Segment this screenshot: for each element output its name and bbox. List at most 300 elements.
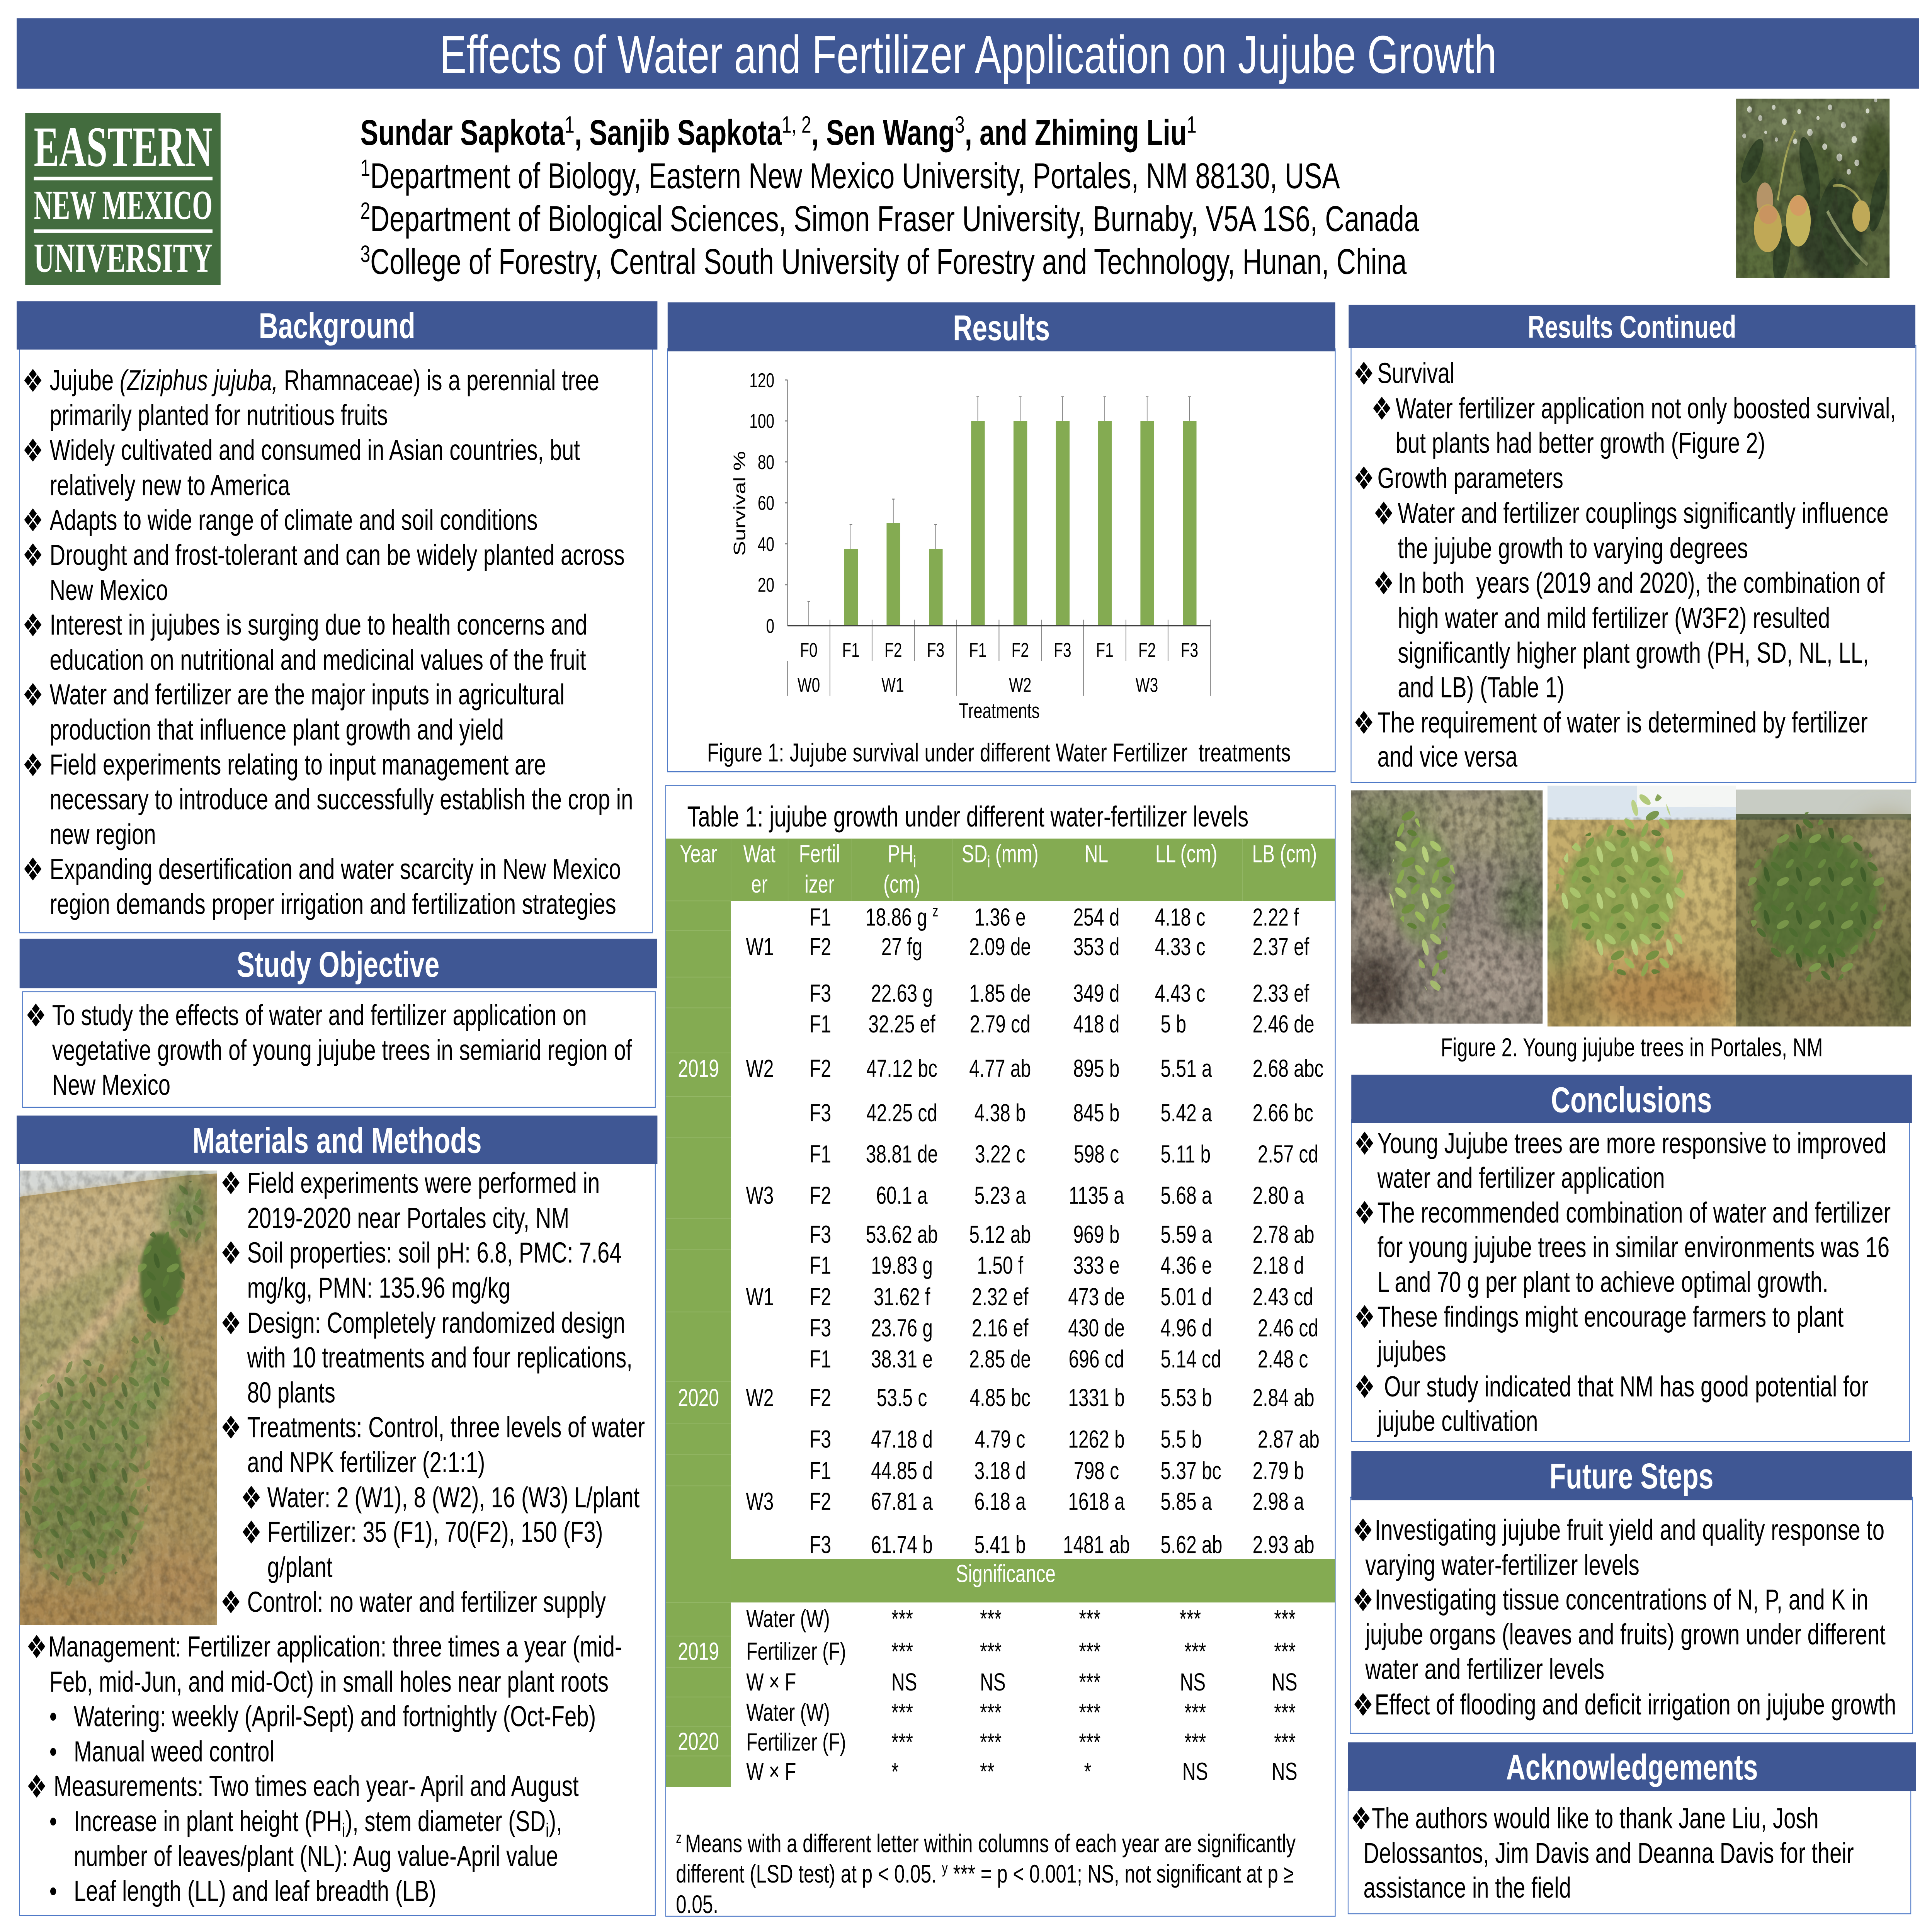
conclusions bullet list: ❖ [1354,1195,1375,1231]
acknowledgements text: Delossantos, Jim Davis and Deanna Davis for their [1363,1837,1854,1869]
future steps bullet list: ❖ [1352,1582,1374,1619]
methods list below photo: • [49,1701,57,1733]
methods list beside photo: ❖ [241,1514,262,1551]
panel: future steps [1350,1451,1913,1733]
bar chart: survival by treatment: F3 [1181,639,1198,661]
table footnote: different (LSD test) at p < 0.05. [676,1860,937,1888]
table body 2019: 4.38 b [975,1099,1026,1126]
bar chart: survival by treatment: 40 [758,533,774,555]
table body 2019: 18.86 g [866,903,927,931]
acknowledgements text [1350,1800,1854,1904]
figure 2 caption: Figure 2. Young jujube trees in Portales, NM [1440,1034,1823,1062]
significance rows: 2020 [678,1728,719,1755]
table body 2020: 5.85 a [1160,1488,1212,1515]
heading: materials and methods [17,1116,657,1164]
panel: table 1 growth data [666,785,1335,1919]
conclusions bullet list: Our study indicated that NM has good potential for [1384,1371,1869,1403]
methods list beside photo: ❖ [220,1584,242,1621]
table body 2019: 27 fg [881,933,922,961]
table body 2020: 1.50 f [977,1252,1023,1279]
table body 2020: 4.36 e [1160,1252,1212,1279]
study objective text: New Mexico [52,1069,170,1101]
table green bands [666,838,1335,1787]
methods list below photo [26,1629,622,1907]
table body 2019: 38.81 de [866,1140,938,1168]
table body 2020: 2.84 ab [1253,1384,1315,1411]
acknowledgements text: ❖ [1350,1800,1372,1837]
authors and affiliations [361,112,1419,282]
table body 2019: W2 [746,1054,774,1082]
table body 2019: 2.66 bc [1253,1099,1313,1126]
results continued bullet list: Water and fertilizer couplings significantly influence [1398,497,1889,530]
background bullet list: Jujube (Ziziphus jujuba, Rhamnaceae) is a perennial tree [49,364,599,397]
table body 2019: 42.25 cd [866,1099,937,1126]
methods list beside photo: 80 plants [247,1377,335,1409]
table body 2020: 2.79 b [1253,1457,1304,1484]
table body 2019: 353 d [1073,933,1119,961]
table body 2019: 2.37 ef [1253,933,1309,961]
title banner: Effects of Water and Fertilizer Application on Jujube Growth [440,24,1497,84]
table body 2020: 5.62 ab [1160,1531,1222,1558]
heading: acknowledgements: Acknowledgements [1506,1748,1758,1787]
background bullet list: ❖ [22,537,43,574]
table body 2019: F1 [810,1140,831,1168]
significance rows: *** [891,1638,913,1665]
heading: results continued [1349,305,1915,348]
table body 2020: 3.18 d [975,1457,1026,1484]
heading: results [668,302,1335,351]
results continued bullet list: ❖ [1373,565,1394,602]
table body 2019: 4.33 c [1155,933,1205,961]
bar chart: survival by treatment: F0 [800,639,818,661]
significance rows: W × F [746,1668,796,1696]
results continued bullet list: and vice versa [1378,741,1517,773]
table body 2019: F1 [810,1010,831,1038]
table body 2020: 1262 b [1068,1425,1125,1453]
future steps bullet list: Investigating tissue concentrations of N, P, and K in [1375,1584,1868,1616]
table body 2020: 473 de [1068,1283,1125,1310]
significance rows: ** [980,1758,994,1785]
significance rows: Fertilizer (F) [746,1728,846,1756]
table header row [680,840,1317,898]
table footnote: z [676,1828,685,1846]
results continued bullet list: The requirement of water is determined by fertilizer [1378,707,1868,739]
table body 2020: 61.74 b [871,1531,933,1558]
significance rows: W × F [746,1758,796,1785]
table body 2020: 2.18 d [1253,1252,1304,1279]
results continued bullet list: ❖ [1353,704,1374,741]
table body 2019: 5.42 a [1160,1099,1212,1126]
background bullet list: education on nutritional and medicinal values of the fruit [49,644,586,676]
table body 2020: 2.98 a [1253,1488,1304,1515]
bar chart: survival by treatment: F1 [969,639,986,661]
significance rows: NS [1180,1668,1206,1696]
table body 2019: 2.09 de [969,933,1031,961]
table body 2019: 1.36 e [975,903,1026,931]
methods list below photo: Feb, mid-Jun, and mid-Oct) in small holes near plant roots [49,1666,609,1698]
table body 2020: 2.46 cd [1258,1314,1318,1342]
background bullet list: Drought and frost-tolerant and can be widely planted across [49,539,625,571]
bar chart: survival by treatment [730,369,1211,723]
table body 2019: 2.78 ab [1253,1221,1315,1248]
methods list below photo: Management: Fertilizer application: three times a year (mid- [48,1631,622,1663]
authors and affiliations: , Sanjib Sapkota [575,113,782,153]
table header row: Year [680,840,717,867]
bar chart: survival by treatment: W2 [1009,674,1031,696]
authors and affiliations: 3 [361,241,370,267]
table body 2020: 5.53 b [1160,1384,1212,1411]
table body 2020: 2.48 c [1258,1345,1308,1372]
table body 2019: F2 [810,1182,831,1209]
results continued bullet list [1353,355,1896,773]
methods list beside photo: Treatments: Control, three levels of water [247,1412,645,1444]
authors and affiliations: , and Zhiming Liu [965,113,1187,153]
results continued bullet list: significantly higher plant growth (PH, SD, NL, LL, [1398,637,1869,669]
table body 2019: 5 b [1160,1010,1186,1038]
table body 2020: F3 [810,1314,831,1342]
table body 2019 [678,902,1323,1248]
table body 2019: 5.68 a [1160,1182,1212,1209]
table body 2019: 598 c [1074,1140,1119,1168]
authors and affiliations: 2 [361,198,370,224]
methods list beside photo: ❖ [220,1409,242,1446]
methods list beside photo: with 10 treatments and four replications, [247,1342,633,1374]
methods list below photo: ❖ [26,1629,47,1665]
photo: young jujube, soil ground [1344,790,1546,1024]
table body 2019: F2 [810,1054,831,1082]
heading: results continued: Results Continued [1528,310,1736,345]
heading: background: Background [259,306,415,346]
methods list beside photo: Fertilizer: 35 (F1), 70(F2), 150 (F3) [267,1516,603,1549]
future steps bullet list: Effect of flooding and deficit irrigation on jujube growth [1375,1689,1896,1721]
bar chart: survival by treatment: F2 [884,639,902,661]
table body 2019: 53.62 ab [866,1221,938,1248]
conclusions bullet list: for young jujube trees in similar environments was 16 [1378,1231,1889,1264]
significance rows: *** [891,1728,913,1756]
panel: background [17,301,657,933]
background bullet list: New Mexico [49,574,168,607]
heading: acknowledgements [1348,1742,1916,1791]
significance rows: *** [1079,1728,1100,1756]
bar chart: survival by treatment: W0 [798,674,820,696]
significance rows: *** [1079,1699,1100,1726]
background bullet list: Interest in jujubes is surging due to health concerns and [49,609,587,641]
title banner [17,18,1919,89]
significance rows: NS [891,1668,917,1696]
table body 2020: 2.16 ef [972,1314,1029,1342]
methods list beside photo: Design: Completely randomized design [247,1307,625,1339]
table header row: izer [804,870,834,898]
background bullet list: Expanding desertification and water scarcity in New Mexico [49,853,621,886]
background bullet list: region demands proper irrigation and fertilization strategies [49,888,616,921]
table body 2020: 2020 [678,1384,719,1411]
table header row: er [751,870,768,898]
methods list below photo: ❖ [26,1768,47,1805]
authors and affiliations: 1 [361,155,370,181]
table body 2020: 67.81 a [871,1488,933,1515]
table footnote: 0.05. [676,1890,718,1919]
table body 2020: 696 cd [1069,1345,1124,1372]
bar chart: survival by treatment: 60 [758,492,774,514]
table header row: PH [888,840,913,867]
authors and affiliations: Department of Biology, Eastern New Mexico University, Portales, NM 88130, USA [370,156,1340,196]
table body 2020: 333 e [1073,1252,1119,1279]
table body 2020: F2 [810,1488,831,1515]
bar chart: survival by treatment: 120 [749,369,774,391]
table body 2020: 31.62 f [874,1283,930,1310]
significance rows: *** [980,1638,1002,1665]
table body 2020: 798 c [1074,1457,1119,1484]
study objective text [25,997,632,1101]
methods list below photo: Manual weed control [74,1736,274,1768]
table body 2019: 1135 a [1069,1182,1124,1209]
background bullet list: ❖ [22,851,43,888]
authors and affiliations: College of Forestry, Central South University of Forestry and Technology, Hunan, China [370,242,1407,282]
results continued bullet list: but plants had better growth (Figure 2) [1396,427,1765,459]
table body 2019: F3 [810,980,831,1007]
table body 2020: W1 [746,1283,774,1310]
table body 2019: 2019 [678,1054,719,1082]
table body 2019: F1 [810,903,831,931]
methods list beside photo: ❖ [220,1235,242,1272]
table body 2020: 38.31 e [871,1345,933,1372]
table body 2020: 1618 a [1068,1488,1125,1515]
methods list beside photo: Water: 2 (W1), 8 (W2), 16 (W3) L/plant [267,1481,639,1514]
table body 2019: F2 [810,933,831,961]
bar chart: survival by treatment: F3 [927,639,944,661]
background bullet list: Field experiments relating to input management are [49,749,546,781]
panel: study objective [20,939,657,1107]
table body 2019: 2.80 a [1253,1182,1304,1209]
photo: jujube fruits on branch [1733,98,1892,284]
authors and affiliations: 1 [1187,112,1197,138]
heading: study objective [20,939,657,988]
table body 2020: 5.41 b [975,1531,1026,1558]
significance rows: NS [1272,1668,1298,1696]
significance rows: NS [1272,1758,1298,1785]
methods list beside photo: mg/kg, PMN: 135.96 mg/kg [247,1272,510,1304]
table body 2019: z [932,902,938,920]
significance rows: * [891,1758,899,1785]
significance rows: *** [1274,1728,1296,1756]
table header row: i [987,852,990,871]
conclusions bullet list: Young Jujube trees are more responsive to improved [1378,1128,1886,1160]
table body 2019: 4.77 ab [969,1054,1031,1082]
significance rows: *** [891,1699,913,1726]
table body 2019: 5.59 a [1160,1221,1212,1248]
heading: conclusions: Conclusions [1551,1080,1712,1120]
results continued bullet list: Growth parameters [1378,462,1563,495]
photo: young jujube rows in field [19,1171,217,1625]
table body 2020: F1 [810,1252,831,1279]
significance rows: *** [1079,1668,1100,1696]
background bullet list: ❖ [22,747,43,784]
background bullet list [22,362,633,921]
panel: results continued [1349,305,1916,782]
significance rows: *** [980,1605,1002,1633]
methods list beside photo: Field experiments were performed in [247,1167,600,1199]
table body 2019: 418 d [1073,1010,1119,1038]
conclusions bullet list: jujube cultivation [1377,1405,1538,1438]
table body 2019: 1.85 de [969,980,1031,1007]
background bullet list: primarily planted for nutritious fruits [49,399,388,432]
table body 2019: 3.22 c [975,1140,1025,1168]
table header row: SD [962,840,987,867]
bar chart: survival by treatment: W3 [1136,674,1158,696]
significance rows: *** [1274,1605,1296,1633]
background bullet list: new region [49,818,156,851]
table body 2019: 2.68 abc [1253,1054,1323,1082]
background bullet list: ❖ [22,607,43,644]
authors and affiliations: Department of Biological Sciences, Simon Fraser University, Burnaby, V5A 1S6, Canada [370,199,1419,239]
bar chart: survival by treatment: 0 [766,615,774,637]
photo: young jujube, shaded bush [1725,790,1918,1031]
panel: materials and methods [0,1116,657,1915]
table body 2020: 4.79 c [975,1425,1025,1453]
table body 2019: W1 [746,933,774,961]
methods list below photo: Increase in plant height (PH [74,1805,342,1838]
background bullet list: ❖ [22,677,43,713]
methods list beside photo: 2019-2020 near Portales city, NM [247,1202,569,1235]
study objective text: vegetative growth of young jujube trees in semiarid region of [52,1034,632,1066]
table body 2020: 4.85 bc [970,1384,1031,1411]
future steps bullet list: ❖ [1352,1687,1374,1723]
heading: future steps: Future Steps [1549,1456,1713,1496]
table footnote [676,1828,1296,1919]
table body 2019: 4.43 c [1155,980,1205,1007]
table body 2020: 5.14 cd [1160,1345,1221,1372]
table body 2020: 1481 ab [1063,1531,1130,1558]
significance rows: *** [891,1605,913,1633]
logo: Eastern New Mexico University [25,113,221,285]
authors and affiliations: 3 [955,112,965,138]
table body 2019: 895 b [1073,1054,1119,1082]
significance rows: NS [980,1668,1006,1696]
background bullet list: necessary to introduce and successfully establish the crop in [49,784,633,816]
conclusions bullet list: jujubes [1377,1335,1446,1368]
panel: acknowledgements [1348,1742,1916,1914]
methods list beside photo: and NPK fertilizer (2:1:1) [247,1446,485,1479]
heading: results: Results [953,308,1050,348]
table header row: (mm) [990,840,1039,867]
logo: Eastern New Mexico University: UNIVERSITY [34,235,213,281]
panel: conclusions [1351,1075,1912,1442]
table body 2020: 19.83 g [871,1252,933,1279]
authors and affiliations: 1 [565,112,575,138]
results continued bullet list: ❖ [1353,460,1374,497]
table body 2019: 2.57 cd [1258,1140,1318,1168]
significance rows: *** [980,1728,1002,1756]
study objective text: To study the effects of water and fertilizer application on [52,999,587,1032]
table header row: Fertil [799,840,840,867]
significance rows: Fertilizer (F) [746,1638,846,1665]
conclusions bullet list: These findings might encourage farmers to plant [1378,1301,1844,1333]
bar chart: survival by treatment: 80 [758,451,774,473]
significance rows [678,1560,1298,1785]
methods list beside photo: ❖ [220,1305,242,1342]
significance rows: Water (W) [746,1605,830,1633]
table footnote: y [942,1859,948,1877]
significance rows: *** [1274,1638,1296,1665]
table body 2019: 60.1 a [876,1182,928,1209]
conclusions bullet list: ❖ [1354,1299,1375,1335]
significance rows: Significance [956,1560,1056,1587]
methods list below photo: Measurements: Two times each year- April and August [54,1770,579,1803]
results continued bullet list: high water and mild fertilizer (W3F2) resulted [1398,602,1830,634]
background bullet list: ❖ [22,362,43,399]
table body 2019: W3 [746,1182,774,1209]
conclusions bullet list: ❖ [1354,1125,1375,1162]
table body 2020: 2.93 ab [1253,1531,1315,1558]
table body 2019: 5.11 b [1160,1140,1211,1168]
methods list below photo: • [49,1736,57,1768]
methods list below photo: • [49,1805,57,1838]
background bullet list: relatively new to America [49,469,290,502]
table body 2020: 44.85 d [871,1457,933,1484]
bar chart: survival by treatment: F2 [1012,639,1029,661]
table body 2020: 4.96 d [1160,1314,1212,1342]
authors and affiliations: , Sen Wang [811,113,955,153]
significance rows: *** [980,1699,1002,1726]
table body 2020: 5.01 d [1160,1283,1212,1310]
bar chart: survival by treatment: Survival % [730,451,749,556]
background bullet list: ❖ [22,432,43,469]
authors and affiliations: 1, 2 [782,112,811,138]
results continued bullet list: Survival [1378,357,1455,390]
study objective text: ❖ [25,997,46,1034]
table body 2020: 53.5 c [877,1384,927,1411]
table body 2019: 47.12 bc [866,1054,937,1082]
table body 2020: 2.43 cd [1253,1283,1313,1310]
table body 2020: 23.76 g [871,1314,933,1342]
background bullet list: Adapts to wide range of climate and soil conditions [49,504,538,536]
conclusions bullet list [1354,1125,1891,1438]
significance rows: 2019 [678,1638,719,1665]
results continued bullet list: Water fertilizer application not only boosted survival, [1396,393,1896,425]
table header row: (cm) [883,870,920,898]
table body 2020: 2.87 ab [1258,1425,1320,1453]
methods list below photo: • [49,1875,57,1907]
results continued bullet list: ❖ [1373,495,1394,532]
methods list below photo: ), stem diameter (SD [345,1805,546,1838]
methods list beside photo: g/plant [267,1551,333,1583]
table body 2020: W3 [746,1488,774,1515]
bar chart: survival by treatment: F3 [1054,639,1071,661]
bar chart: survival by treatment: F1 [842,639,860,661]
conclusions bullet list: The recommended combination of water and fertilizer [1378,1197,1891,1229]
background bullet list: Water and fertilizer are the major inputs in agricultural [49,679,565,711]
table body 2019: 845 b [1073,1099,1119,1126]
methods list beside photo: ❖ [220,1165,242,1202]
table header row: LL (cm) [1155,840,1217,867]
future steps bullet list: varying water-fertilizer levels [1365,1549,1639,1582]
bar chart: survival by treatment: F2 [1138,639,1156,661]
background bullet list: Widely cultivated and consumed in Asian countries, but [49,434,580,467]
table body 2019: F3 [810,1099,831,1126]
significance rows: *** [1079,1638,1100,1665]
panel: results [668,302,1335,772]
authors and affiliations: Sundar Sapkota [361,113,565,153]
table header row: i [913,852,916,871]
table body 2019: 254 d [1073,903,1119,931]
bar chart: survival by treatment: 100 [749,410,774,432]
heading: materials and methods: Materials and Methods [192,1121,481,1161]
methods list below photo: number of leaves/plant (NL): Aug value-April value [74,1840,558,1873]
table body 2019: 969 b [1073,1221,1119,1248]
table body 2019: 5.12 ab [969,1221,1031,1248]
future steps bullet list [1352,1512,1896,1723]
table body 2020: F3 [810,1531,831,1558]
